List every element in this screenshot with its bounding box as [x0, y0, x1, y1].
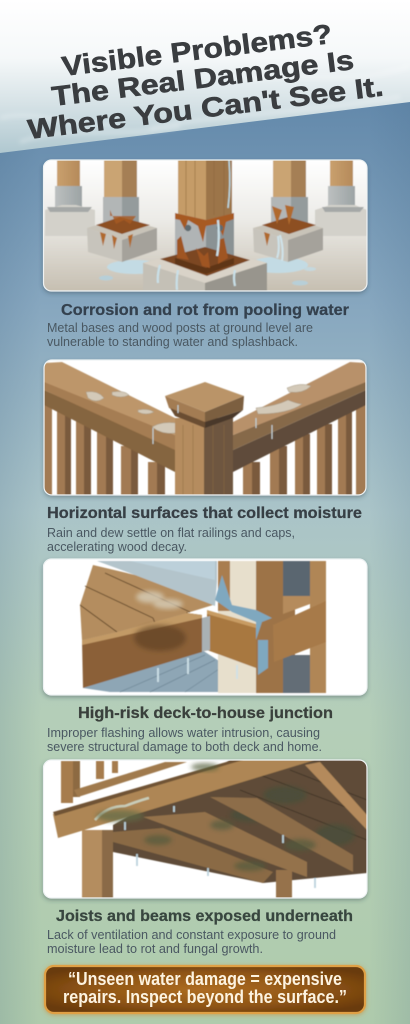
panel: corrosion and rot: [43, 160, 367, 349]
image card: ledger junction: [43, 559, 367, 695]
panel: joists and beams: [43, 758, 367, 956]
heading: High-risk deck-to-house junction: [78, 705, 333, 722]
heading: Joists and beams exposed underneath: [56, 908, 353, 925]
callout: repairs. Inspect beyond the surface.”: [63, 987, 347, 1007]
title: Visible Problems?: [60, 18, 334, 82]
image card: wet railing: [44, 360, 366, 495]
description: Improper flashing allows water intrusion, causing: [47, 726, 320, 740]
description: [47, 726, 322, 754]
image card: underside of deck: [43, 758, 367, 898]
joists: [210, 797, 353, 872]
description: accelerating wood decay.: [47, 540, 187, 554]
image card: rusted post bases: [43, 160, 367, 291]
title: The Real Damage Is: [50, 44, 355, 112]
description: [47, 321, 313, 349]
description: [47, 928, 336, 956]
callout: [45, 966, 365, 1013]
description: Lack of ventilation and constant exposure to ground: [47, 928, 336, 942]
description: [47, 526, 295, 554]
callout: “Unseen water damage = expensive: [68, 969, 342, 989]
title: [26, 18, 385, 145]
heading: Corrosion and rot from pooling water: [61, 302, 349, 319]
description: severe structural damage to both deck and home.: [47, 740, 322, 754]
panel: deck-to-house junction: [43, 559, 367, 754]
heading: Horizontal surfaces that collect moisture: [47, 505, 362, 522]
description: Rain and dew settle on flat railings and caps,: [47, 526, 295, 540]
description: moisture lead to rot and fungal growth.: [47, 942, 263, 956]
description: Metal bases and wood posts at ground level are: [47, 321, 313, 335]
description: vulnerable to standing water and splashback.: [47, 335, 298, 349]
deck boards: [80, 565, 213, 640]
title: Where You Can't See It.: [26, 71, 385, 145]
header band with water texture: [0, 0, 410, 153]
panel: horizontal surfaces: [44, 360, 366, 554]
